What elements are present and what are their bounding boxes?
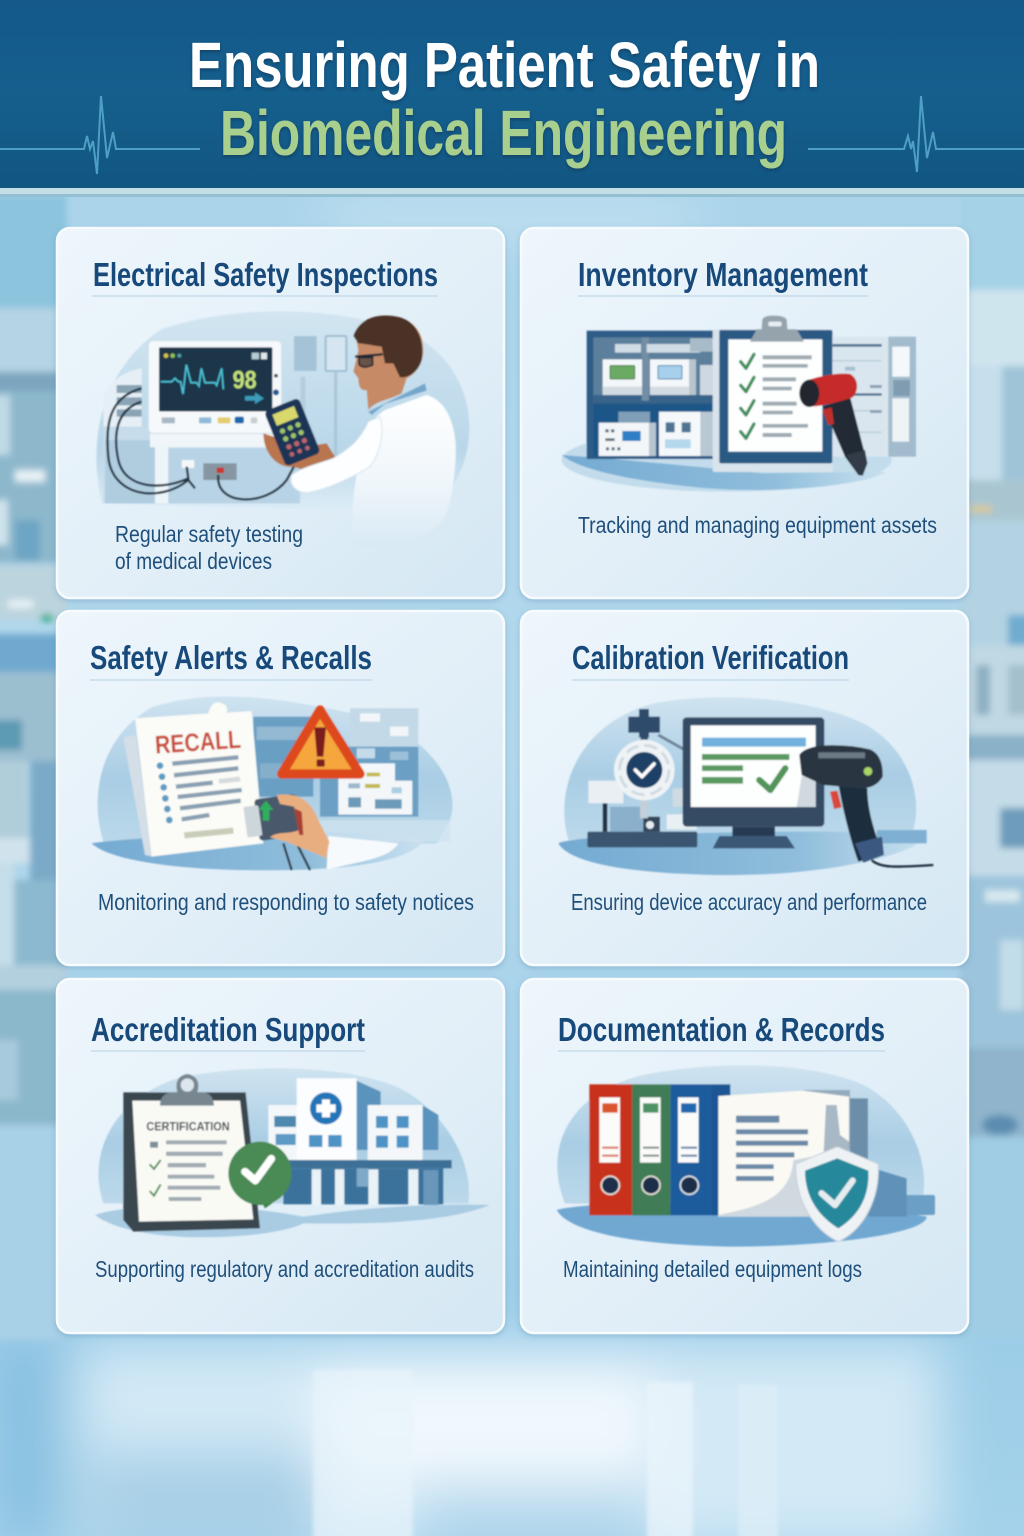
- notice card: [338, 763, 412, 815]
- description: Supporting regulatory and accreditation audits: [95, 1256, 474, 1282]
- cables: [107, 388, 298, 499]
- cable leads: [283, 843, 310, 870]
- clipboard: CERTIFICATION: [146, 1119, 230, 1133]
- green binder: [632, 1084, 670, 1215]
- clipboard: [123, 1074, 260, 1232]
- header banner: [0, 0, 1024, 197]
- left strip: [0, 195, 67, 1340]
- title accent line: Biomedical Engineering: [220, 97, 787, 169]
- heading: Accreditation Support: [91, 1011, 365, 1048]
- document: RECALL: [154, 726, 242, 760]
- coat sleeve: [291, 417, 382, 493]
- heartbeat line left: [0, 96, 200, 174]
- panel: documentation and records: [521, 979, 968, 1333]
- illustration: recall notice and warning: [92, 696, 452, 870]
- shelf unit: [587, 331, 717, 459]
- medical cart: [103, 368, 300, 503]
- background shelving: [253, 708, 418, 817]
- sleeve: [327, 836, 398, 869]
- patient monitor: [148, 341, 282, 433]
- patient monitor: 98: [233, 368, 257, 395]
- description: Tracking and managing equipment assets: [578, 512, 937, 538]
- panel: safety alerts and recalls: [57, 611, 504, 965]
- heading: Safety Alerts & Recalls: [90, 639, 372, 676]
- barcode scanner: [799, 745, 933, 867]
- heading: Electrical Safety Inspections: [93, 256, 438, 293]
- blue binder: [670, 1084, 730, 1215]
- red binder: [589, 1084, 632, 1215]
- illustration: certification clipboard and hospital: [95, 1068, 490, 1237]
- document: [123, 702, 263, 857]
- shield: [796, 1147, 878, 1242]
- description: of medical devices: [115, 548, 272, 574]
- description: Regular safety testing: [115, 521, 303, 547]
- barcode scanner: [799, 374, 867, 476]
- illustration: calibration rig, monitor and scanner: [558, 697, 933, 875]
- illustration: engineer testing monitor: [96, 311, 469, 546]
- green check badge: [228, 1142, 292, 1208]
- outlet and plugs: [182, 460, 237, 480]
- computer monitor: [683, 717, 824, 848]
- hand and tester: [263, 398, 339, 475]
- panel: electrical safety inspections: [57, 228, 504, 598]
- document: [718, 1091, 849, 1217]
- right strip: [960, 195, 1024, 1337]
- illustration: binders, document and shield: [557, 1065, 935, 1247]
- engineer: [352, 316, 456, 546]
- panel: calibration verification: [521, 611, 968, 965]
- warning triangle: [282, 710, 360, 774]
- panel: accreditation support: [57, 979, 504, 1333]
- calibration rig: [587, 709, 697, 847]
- right cabinet: [832, 337, 916, 457]
- clipboard: [713, 316, 833, 472]
- description: Maintaining detailed equipment logs: [563, 1256, 862, 1282]
- heading: Inventory Management: [578, 256, 868, 293]
- background folders: [803, 1090, 907, 1217]
- description: Monitoring and responding to safety notices: [98, 889, 474, 915]
- wall equipment: [294, 336, 346, 458]
- illustration: shelves, checklist and scanner: [562, 316, 916, 492]
- device in hand: [243, 794, 329, 858]
- heading: Calibration Verification: [572, 639, 849, 676]
- hospital building: [268, 1078, 452, 1205]
- panel: inventory management: [521, 228, 968, 598]
- heading: Documentation & Records: [558, 1011, 885, 1048]
- description: [115, 521, 303, 574]
- description: Ensuring device accuracy and performance: [571, 889, 927, 915]
- heartbeat line right: [808, 96, 1024, 172]
- title: Ensuring Patient Safety in: [189, 29, 820, 101]
